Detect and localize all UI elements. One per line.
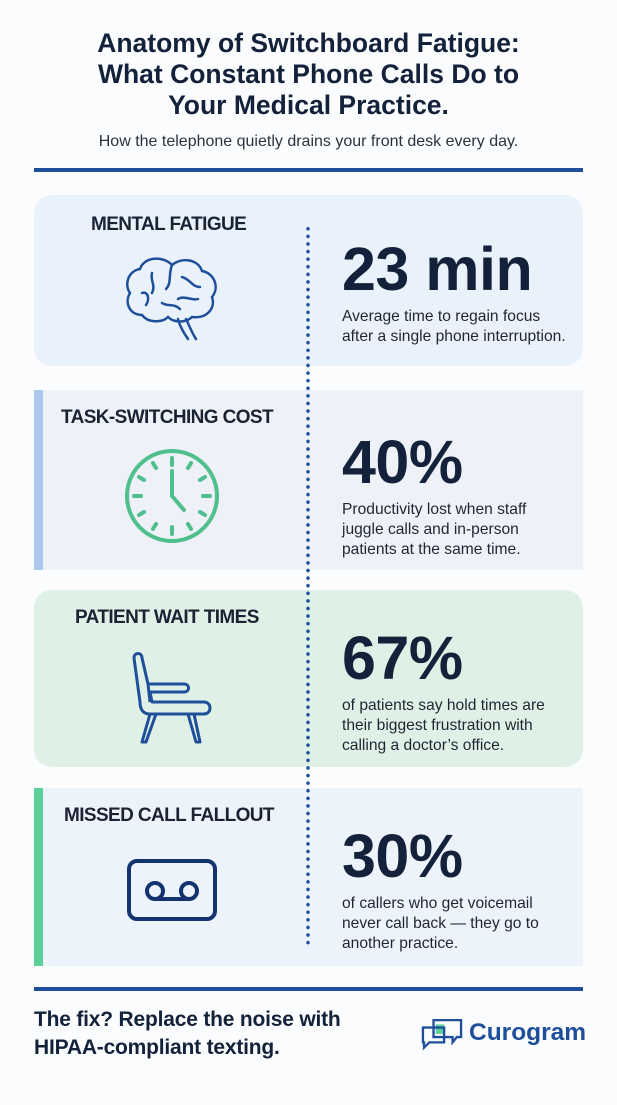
title: What Constant Phone Calls Do to: [98, 59, 519, 89]
title: [97, 28, 520, 120]
panel: missed call fallout: [34, 788, 583, 966]
stat: 30%: another practice.: [342, 935, 458, 952]
logo: curogram: Curogram: [469, 1019, 586, 1046]
stat: 40%: Productivity lost when staff: [342, 501, 526, 518]
icon: clock: [125, 449, 219, 543]
stat: 40%: patients at the same time.: [342, 541, 521, 558]
dotted timeline: [306, 225, 310, 945]
stat: 23 min: 23 min: [342, 235, 532, 303]
stat: 30%: [342, 822, 539, 952]
icon: chat bubbles: [422, 1019, 462, 1050]
stat: 67%: their biggest frustration with: [342, 717, 533, 734]
footer text: The fix? Replace the noise with: [34, 1008, 341, 1031]
icon: brain: [126, 257, 217, 340]
heading: missed call: MISSED CALL FALLOUT: [64, 805, 274, 826]
stat: 67%: calling a doctor’s office.: [342, 737, 504, 754]
title: Anatomy of Switchboard Fatigue:: [97, 28, 520, 58]
stat: 40%: [342, 428, 526, 558]
icon: voicemail: [127, 859, 217, 921]
logo: curogram: [422, 1019, 586, 1050]
title: Your Medical Practice.: [168, 90, 449, 120]
stat: 40%: 40%: [342, 428, 463, 496]
subtitle: How the telephone quietly drains your front desk every day.: [99, 133, 518, 150]
heading: wait times: PATIENT WAIT TIMES: [75, 607, 259, 628]
stat: 30%: of callers who get voicemail: [342, 895, 533, 912]
stat: 67%: of patients say hold times are: [342, 697, 545, 714]
footer text: HIPAA-compliant texting.: [34, 1036, 280, 1059]
stat: 23 min: after a single phone interruption.: [342, 328, 566, 345]
panel: patient wait times: [34, 590, 583, 767]
stat: 40%: juggle calls and in-person: [342, 521, 519, 538]
footer text: [34, 1008, 341, 1059]
stat: 67%: [342, 624, 545, 754]
stat: 23 min: Average time to regain focus: [342, 308, 540, 325]
heading: task-switching: TASK-SWITCHING COST: [61, 407, 273, 428]
heading: mental fatigue: MENTAL FATIGUE: [91, 214, 246, 235]
stat: 30%: never call back — they go to: [342, 915, 539, 932]
stat: 67%: 67%: [342, 624, 463, 692]
panel: mental fatigue: [34, 195, 583, 366]
stat: 23 min: [342, 235, 566, 345]
panel: task-switching cost: [34, 390, 583, 570]
stat: 30%: 30%: [342, 822, 463, 890]
icon: chair: [132, 652, 212, 744]
